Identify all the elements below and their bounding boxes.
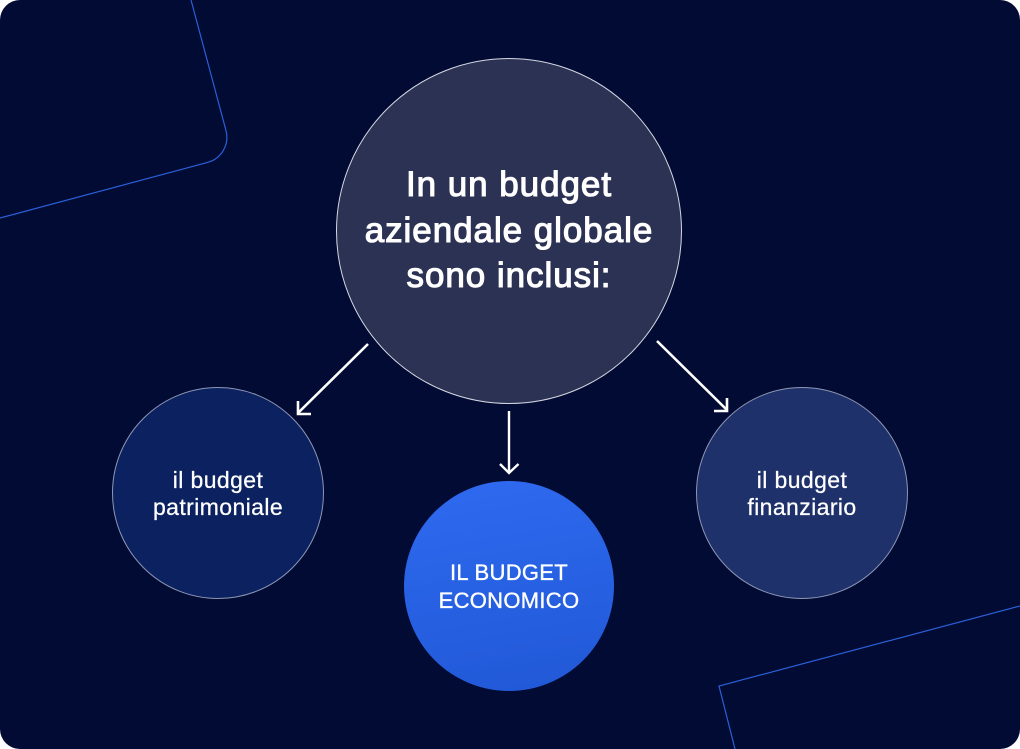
left label: il budget [173,467,263,493]
center circle [404,481,614,691]
left label: patrimoniale [153,494,283,520]
main heading [365,165,653,295]
right label [747,467,857,520]
right label: finanziario [747,494,857,520]
main circle [336,58,682,404]
left label [153,467,283,520]
left circle [112,387,324,599]
arrow: right [657,341,727,411]
arrow: center [500,411,518,473]
arrow: left [298,344,368,414]
right circle [696,387,908,599]
center label: ECONOMICO [439,588,579,613]
right label: il budget [757,467,847,493]
center label: IL BUDGET [450,560,568,585]
main heading: sono inclusi: [407,256,611,295]
center label [439,560,579,613]
main heading: aziendale globale [365,210,653,250]
main heading: In un budget [406,165,612,204]
